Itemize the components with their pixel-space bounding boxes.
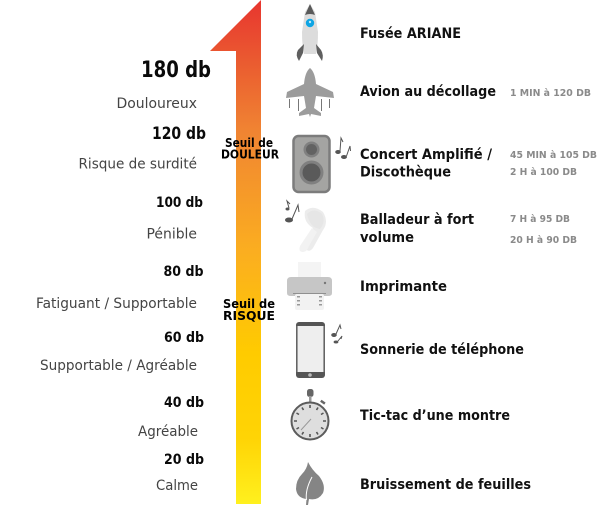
- threshold label: pain: [221, 136, 279, 162]
- decibel scale labels: Risque de surdité: [78, 156, 197, 172]
- icon: music notes near earbuds: [285, 201, 299, 222]
- threshold label: risk: RISQUE: [223, 309, 275, 323]
- icon: printer: [287, 262, 332, 310]
- threshold label: pain: Seuil de: [225, 136, 273, 150]
- gradient arrow scale: [210, 0, 261, 504]
- source labels: [360, 26, 531, 493]
- decibel scale labels: Fatiguant / Supportable: [36, 296, 197, 312]
- icon: earbuds: [299, 208, 326, 252]
- source labels: volume: [360, 230, 414, 246]
- source labels: Tic-tac d’une montre: [360, 408, 510, 424]
- icon: smartphone: [296, 322, 325, 378]
- threshold label: risk: Seuil de: [223, 297, 275, 311]
- decibel scale labels: Douloureux: [116, 96, 197, 112]
- decibel scale labels: 40 db: [164, 395, 204, 411]
- icon: leaf: [296, 462, 324, 505]
- decibel scale labels: 180 db: [141, 58, 211, 83]
- source labels: Discothèque: [360, 164, 451, 180]
- source labels: Avion au décollage: [360, 84, 496, 100]
- source labels: Bruissement de feuilles: [360, 477, 531, 493]
- exposure durations: 7 H à 95 DB: [510, 213, 570, 225]
- decibel scale labels: [36, 58, 211, 494]
- icon: music notes near speaker: [335, 138, 350, 159]
- exposure durations: [510, 87, 597, 246]
- decibel scale labels: Supportable / Agréable: [40, 358, 197, 374]
- icon: music notes near phone: [331, 325, 342, 344]
- decibel scale labels: Agréable: [138, 424, 198, 440]
- icon: speaker: [294, 136, 330, 192]
- decibel scale labels: 80 db: [164, 264, 204, 280]
- decibel scale labels: 100 db: [156, 195, 203, 211]
- decibel scale labels: Calme: [156, 478, 198, 494]
- exposure durations: 1 MIN à 120 DB: [510, 87, 591, 99]
- decibel scale labels: 60 db: [164, 330, 204, 346]
- source labels: Fusée ARIANE: [360, 26, 461, 42]
- source labels: Imprimante: [360, 279, 447, 295]
- decibel scale labels: 120 db: [152, 124, 206, 143]
- threshold label: pain: DOULEUR: [221, 148, 279, 162]
- threshold label: risk: [223, 297, 275, 323]
- source labels: Concert Amplifié /: [360, 147, 493, 163]
- exposure durations: 20 H à 90 DB: [510, 234, 577, 246]
- icon: stopwatch: [292, 389, 328, 440]
- source labels: Balladeur à fort: [360, 212, 474, 228]
- source labels: Sonnerie de téléphone: [360, 342, 524, 358]
- exposure durations: 2 H à 100 DB: [510, 166, 577, 178]
- icon: airplane: [286, 68, 334, 117]
- decibel scale labels: Pénible: [146, 226, 197, 242]
- decibel scale labels: 20 db: [164, 452, 204, 468]
- icon: rocket: [297, 4, 323, 61]
